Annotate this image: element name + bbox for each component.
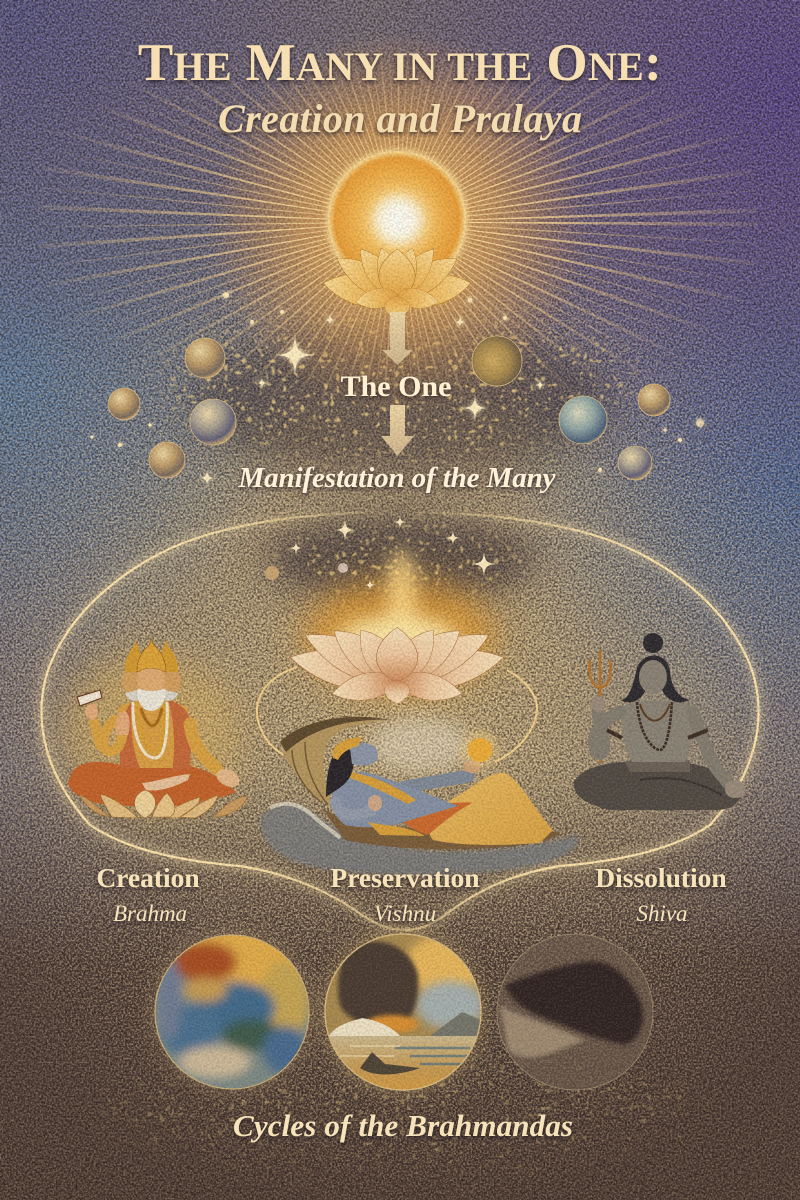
the One: sun orb [325, 148, 469, 292]
heads [122, 669, 181, 693]
hair [620, 656, 690, 702]
solar halo [208, 32, 588, 412]
torso [332, 772, 458, 827]
lotus seat [79, 790, 248, 818]
radiating light rays [188, 12, 608, 432]
book [77, 690, 102, 706]
necklaces [133, 702, 167, 758]
subtitle: Creation and Pralaya [218, 96, 582, 141]
dhoti [428, 773, 553, 845]
right arm [190, 724, 216, 768]
crown [332, 737, 362, 760]
raised arm [405, 776, 468, 787]
arrow: to the Many [381, 405, 414, 456]
figure: Brahma [58, 638, 248, 818]
trident [589, 650, 611, 763]
label: Preservation, Vishnu: Preservation [330, 862, 480, 893]
torso [621, 700, 694, 762]
globe: dissolution [497, 933, 654, 1090]
label: Creation, Brahma: Brahma [113, 901, 187, 926]
head [350, 743, 378, 766]
label: Dissolution, Shiva: Shiva [636, 901, 688, 926]
title: THE MANY IN THE ONE: [138, 34, 662, 92]
globe: preservation [321, 930, 485, 1094]
figure: Shiva [574, 633, 745, 810]
large lotus [286, 619, 508, 707]
orange sash [403, 802, 472, 835]
inner halo ring around Vishnu [257, 667, 537, 762]
label: Creation, Brahma: Creation [96, 862, 200, 893]
right hand [214, 766, 242, 790]
label: Dissolution, Shiva [595, 862, 727, 926]
golden sash [350, 772, 425, 836]
heading: The One: The One [341, 370, 451, 403]
lower arm [335, 802, 372, 815]
globe: creation [150, 923, 320, 1095]
stars of manifestation [90, 292, 704, 486]
beards [125, 690, 178, 701]
serpent coil [322, 808, 560, 849]
hair [326, 745, 354, 797]
small lotus [321, 242, 473, 319]
arms [594, 712, 730, 785]
raised arms [94, 720, 123, 751]
crowns [125, 640, 178, 672]
label: Preservation, Vishnu: Vishnu [374, 901, 436, 926]
hands [591, 696, 745, 798]
necklaces [637, 702, 672, 750]
pale glow near face [370, 717, 470, 773]
label: Dissolution, Shiva: Dissolution [595, 862, 727, 893]
serpent hood [280, 717, 392, 810]
central glow and cluster of stars [265, 515, 497, 690]
heading: Manifestation of the Many: Manifestation of the Many [238, 462, 556, 494]
shawl [120, 700, 192, 772]
lap hand [142, 774, 190, 791]
head [639, 660, 667, 694]
label: Creation, Brahma [96, 862, 200, 926]
hands [85, 704, 130, 735]
water [260, 804, 578, 875]
wave foam [270, 804, 340, 838]
planets [108, 336, 670, 480]
arrow: from the One [382, 312, 413, 365]
caption: Cycles of the Brahmandas: Cycles of the Brahmandas [233, 1108, 573, 1143]
armlets [607, 730, 708, 738]
label: Preservation, Vishnu [330, 862, 480, 926]
legs [574, 762, 740, 810]
figure: Vishnu on the serpent [260, 717, 578, 875]
crossed legs [68, 762, 236, 806]
hand and orb [463, 761, 481, 773]
torso [118, 700, 188, 768]
enclosing golden loop [41, 512, 759, 930]
